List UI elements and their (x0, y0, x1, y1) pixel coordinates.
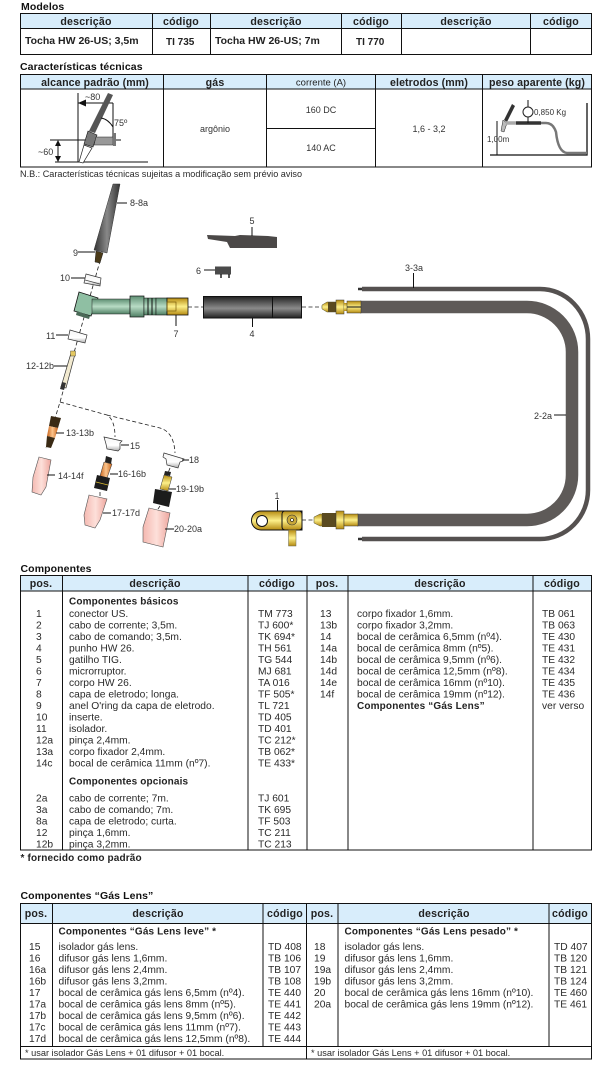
right block: descrições: bocal de cerâmica 6,5mm (nº4). (357, 632, 502, 643)
part 4: handle: 4 (249, 329, 255, 339)
column: descrições: cabo de comando; 7m. (69, 805, 173, 816)
left block: leve: 17b (29, 1011, 46, 1022)
left block: leve: TE 442 (268, 1011, 301, 1022)
left block: leve: TE 444 (268, 1034, 301, 1045)
part 13: fixing body: 13-13b (66, 428, 94, 438)
table header row: código (544, 578, 580, 590)
part 19: heavy gas lens diffuser: 19-19b (176, 484, 204, 494)
column: códigos: TF 505* (258, 690, 294, 700)
column: códigos: TD 401 (258, 724, 292, 735)
right block: descrições: bocal de cerâmica 16mm (nº10). (357, 678, 505, 689)
diagram: peso aparente: 1,00m (487, 135, 510, 144)
table header row (60, 16, 579, 28)
column: descrições: pinça 1,6mm. (69, 828, 131, 839)
table header row: gás (206, 77, 224, 89)
column: descrições: capa de eletrodo; longa. (69, 690, 179, 700)
diagram: exploded view of torch (26, 184, 588, 547)
connector: cable bottom (314, 511, 358, 529)
left block: leve: Componentes “Gás Lens leve” * (58, 926, 216, 938)
left block: leve: TB 108 (268, 976, 301, 988)
table header row: código (267, 908, 303, 920)
column: descrições: conector US. (69, 609, 128, 620)
right block: pesado: bocal de cerâmica gás lens 16mm (nº10). (344, 988, 533, 999)
part 9: o-ring (73, 248, 103, 263)
part 15: gas lens insulator: 15 (130, 441, 140, 451)
table header row: pos. (316, 578, 338, 590)
cell: corrente 140 AC: 140 AC (306, 143, 336, 153)
column: códigos: TF 503 (258, 816, 291, 828)
table header row: código (353, 16, 389, 28)
part 5: trigger (207, 216, 277, 248)
right block: códigos: TE 432 (542, 655, 575, 666)
right block: pesado: 20 (314, 988, 326, 999)
left block: leve: 16b (29, 976, 46, 988)
left block: leve: TE 441 (268, 1000, 301, 1010)
diagram: peso aparente (487, 100, 587, 155)
left block: leve: bocal de cerâmica gás lens 6,5mm (nº4). (58, 988, 245, 999)
part 20: heavy gas lens nozzle: 20-20a (174, 524, 202, 534)
right block: códigos: TE 430 (542, 632, 575, 643)
table header row: pos. (25, 908, 47, 920)
table header row: código (259, 578, 295, 590)
right block: posições: 13b (320, 620, 337, 632)
column: descrições: punho HW 26. (69, 644, 135, 654)
left block: leve: 15 (29, 942, 41, 953)
right block: pesado: 19 (314, 954, 326, 964)
right block: pesado: Componentes “Gás Lens pesado” * (344, 926, 518, 938)
left block: leve: 16a (29, 965, 46, 976)
note: left footer: * usar isolador Gás Lens + 01 difusor + 01 bocal. (25, 1048, 224, 1058)
right block: posições: 14d (320, 666, 337, 678)
column: códigos: TH 561 (258, 644, 292, 654)
part 17: gas lens nozzle: 17-17d (112, 508, 140, 518)
column: códigos: TE 433* (258, 758, 295, 770)
column: posições básicos: 12b (36, 840, 53, 850)
column: posições básicos (36, 609, 53, 850)
heading: Modelos: Modelos (21, 1, 64, 13)
heading: Componentes: Componentes (20, 563, 92, 575)
column: posições básicos: 5 (36, 655, 42, 666)
column: códigos: TK 695 (258, 805, 291, 816)
right block: pesado: difusor gás lens 3,2mm. (344, 976, 453, 988)
column: descrições: gatilho TIG. (69, 655, 122, 666)
right block: pesado: 20a (314, 1000, 331, 1010)
table: características técnicas (20, 74, 592, 167)
column: códigos: TB 062* (258, 747, 295, 758)
column: códigos (258, 609, 296, 850)
cell: gás: argônio (200, 124, 230, 134)
right block: posições: 13 (320, 609, 332, 620)
column: posições básicos: 8a (36, 816, 48, 828)
left block: leve: bocal de cerâmica gás lens 8mm (nº5). (58, 1000, 236, 1010)
column: posições básicos: 11 (36, 724, 47, 735)
column: códigos: TJ 600* (258, 620, 293, 632)
right block: posições: 14 (320, 632, 332, 643)
left block: leve: difusor gás lens 3,2mm. (58, 976, 167, 988)
right block: posições: 14f (320, 690, 334, 700)
column: descrições: pinça 3,2mm. (69, 840, 131, 850)
table header row: descrição (414, 578, 466, 590)
part 18: heavy gas lens insulator: 18 (189, 455, 199, 465)
column: posições básicos: 2a (36, 794, 48, 804)
table: modelos (20, 14, 592, 54)
column: códigos: TC 213 (258, 840, 292, 850)
right block: descrições: bocal de cerâmica 9,5mm (nº6). (357, 655, 502, 666)
right block: pesado: isolador gás lens. (344, 942, 424, 953)
column: descrições: cabo de corrente; 7m. (69, 794, 169, 804)
diagram: alcance padrão: ~80 (85, 92, 100, 102)
right block: códigos: TB 061 (542, 609, 575, 620)
note: N.B.: N.B.: Características técnicas sujeitas a modificação sem prévio aviso (20, 169, 302, 179)
right block: códigos: TE 436 (542, 690, 575, 700)
column: descrições: pinça 2,4mm. (69, 736, 131, 746)
column: códigos: TA 016 (258, 678, 290, 689)
cell: eletrodos: 1,6 - 3,2 (412, 124, 446, 134)
part 3: control cable (358, 263, 588, 539)
column: posições básicos: 13a (36, 747, 53, 758)
right block: posições: 14e (320, 678, 337, 689)
note: right footer: * usar isolador Gás Lens + 01 difusor + 01 bocal. (311, 1048, 510, 1058)
diagram: alcance padrão: ~60 (38, 147, 53, 157)
table header row (25, 908, 588, 920)
left block: leve: TE 440 (268, 988, 301, 999)
assembly dashed lines (46, 254, 322, 520)
column: posições básicos: 9 (36, 701, 42, 712)
part 3: control cable: 3-3a (405, 263, 423, 273)
table header row: descrição (418, 908, 470, 920)
part 16: gas lens diffuser: 16-16b (118, 469, 146, 479)
column: descrições: cabo de comando; 3,5m. (69, 632, 182, 643)
footnote: fornecido como padrão: * fornecido como padrão (20, 853, 142, 864)
part 17: gas lens nozzle (84, 495, 140, 528)
column: descrições: corpo fixador 2,4mm. (69, 747, 165, 758)
right block: descrições: bocal de cerâmica 12,5mm (nº8). (357, 666, 508, 678)
table header row: descrição (440, 16, 492, 28)
right block: descrições: corpo fixador 3,2mm. (357, 620, 453, 632)
right block: descrições (357, 609, 508, 712)
right block: códigos: ver verso (542, 701, 584, 712)
right block: códigos: TE 435 (542, 678, 575, 689)
right block: pesado: TD 407 (554, 942, 588, 953)
part 13: fixing body (46, 416, 94, 448)
right block: pesado: difusor gás lens 1,6mm. (344, 954, 453, 964)
column: descrições: cabo de corrente; 3,5m. (69, 620, 177, 632)
left block: leve: difusor gás lens 2,4mm. (58, 965, 167, 976)
column: descrições (69, 596, 215, 850)
right block: pesado: 18 (314, 942, 326, 953)
part 8: electrode cap: 8-8a (130, 198, 148, 208)
left block: leve: 17a (29, 1000, 46, 1010)
column: posições básicos: 2 (36, 620, 42, 632)
column: códigos: TG 544 (258, 655, 292, 666)
column: posições básicos: 12a (36, 736, 53, 746)
right block: códigos: TE 434 (542, 666, 575, 678)
column: posições básicos: 4 (36, 644, 42, 654)
column: descrições: isolador. (69, 724, 107, 735)
column: posições básicos: 3 (36, 632, 42, 643)
column: descrições: inserte. (69, 712, 103, 724)
table body row: TI 770 (356, 37, 385, 48)
column: posições básicos: 1 (36, 609, 42, 620)
heading: Componentes Gás Lens: Componentes “Gás Lens” (20, 890, 153, 902)
part 7: torch body (74, 292, 188, 339)
table header row: peso aparente (kg) (489, 77, 585, 89)
left block: leve: bocal de cerâmica gás lens 9,5mm (nº6). (58, 1011, 245, 1022)
right block: descrições: corpo fixador 1,6mm. (357, 609, 453, 620)
table header row: pos. (30, 578, 52, 590)
left block: leve: difusor gás lens 1,6mm. (58, 954, 167, 964)
right block: descrições: bocal de cerâmica 8mm (nº5). (357, 644, 493, 654)
table header row: código (552, 908, 588, 920)
table body row: Tocha HW 26-US; 7m (215, 35, 320, 47)
table body row: TI 735 (166, 37, 195, 48)
part 14: ceramic nozzle: 14-14f (58, 471, 84, 481)
table header row: descrição (129, 578, 181, 590)
right block: pesado: TE 461 (554, 1000, 587, 1010)
table body row: Tocha HW 26-US; 3,5m (25, 35, 139, 47)
left block: leve: bocal de cerâmica gás lens 12,5mm (nº8). (58, 1034, 250, 1045)
table: componentes (20, 576, 592, 850)
column: códigos: TK 694* (258, 632, 295, 643)
column: códigos: TD 405 (258, 712, 292, 724)
table header row: código (543, 16, 579, 28)
heading: Características técnicas: Características técnicas (20, 61, 143, 73)
table header row: eletrodos (mm) (390, 77, 468, 89)
column: posições básicos: 14c (36, 758, 53, 770)
table header row: alcance padrão (mm) (41, 77, 149, 89)
right block: pesado (314, 926, 588, 1010)
part 2: current cable (357, 307, 572, 520)
part 12: collet (26, 351, 76, 390)
part 20: heavy gas lens nozzle (143, 508, 202, 547)
part 19: heavy gas lens diffuser (153, 471, 204, 507)
left block: leve: isolador gás lens. (58, 942, 138, 953)
column: descrições: capa de eletrodo; curta. (69, 816, 177, 828)
table header row: descrição (132, 908, 184, 920)
right block: pesado: TB 120 (554, 954, 587, 964)
part 6: microswitch: 6 (196, 266, 201, 276)
column: códigos: MJ 681 (258, 666, 292, 678)
table header row: descrição (250, 16, 302, 28)
part 18: heavy gas lens insulator (163, 453, 199, 468)
right block: posições: 14b (320, 655, 337, 666)
left block: leve: TE 443 (268, 1022, 301, 1034)
part 8: electrode cap (94, 184, 148, 253)
connector: cable top (322, 300, 361, 314)
right block: posições (320, 609, 337, 700)
table header row (30, 578, 580, 590)
part 1: US connector (252, 491, 302, 546)
diagram: peso aparente: 0,850 Kg (534, 108, 566, 117)
column: descrições: anel O'ring da capa de eletrodo. (69, 701, 215, 712)
part 10: insert (60, 273, 101, 286)
part 2: current cable: 2-2a (534, 411, 552, 421)
column: posições básicos: 10 (36, 712, 48, 724)
diagram: alcance padrão (38, 92, 148, 163)
column: descrições: bocal de cerâmica 11mm (nº7). (69, 758, 210, 770)
right block: pesado: difusor gás lens 2,4mm. (344, 965, 453, 976)
column: descrições: corpo HW 26. (69, 678, 132, 689)
part 14: ceramic nozzle (32, 457, 84, 495)
table header row: corrente (A) (296, 78, 346, 88)
part 9: o-ring: 9 (73, 248, 78, 258)
left block: leve (29, 926, 302, 1045)
right block: descrições: Componentes “Gás Lens” (357, 701, 485, 712)
part 6: microswitch (196, 266, 231, 278)
part 11: insulator (46, 330, 87, 343)
right block: pesado: TE 460 (554, 988, 587, 999)
part 12: collet: 12-12b (26, 361, 54, 371)
right block: posições: 14a (320, 644, 337, 654)
part 1: US connector: 1 (274, 491, 280, 501)
right block: pesado: 19a (314, 965, 331, 976)
right block: pesado: bocal de cerâmica gás lens 19mm (nº12). (344, 1000, 533, 1010)
left block: leve: 17d (29, 1034, 46, 1045)
column: posições básicos: 7 (36, 678, 42, 689)
column: posições básicos: 12 (36, 828, 48, 839)
diagram: alcance padrão: 75º (114, 118, 128, 128)
table: componentes gás lens (20, 904, 592, 1059)
part 4: handle (204, 296, 302, 339)
right block: códigos: TB 063 (542, 620, 575, 632)
column: códigos: TC 212* (258, 736, 296, 746)
column: descrições: Componentes opcionais (69, 776, 189, 788)
part 10: insert: 10 (60, 273, 70, 283)
cell: corrente 160 DC: 160 DC (306, 105, 337, 115)
table header row: código (163, 16, 199, 28)
part 15: gas lens insulator (104, 437, 140, 451)
part 11: insulator: 11 (46, 331, 55, 341)
right block: pesado: TB 121 (554, 965, 587, 976)
table header row: descrição (60, 16, 112, 28)
right block: códigos: TE 431 (542, 644, 575, 654)
right block: pesado: 19b (314, 976, 331, 988)
column: posições básicos: 6 (36, 666, 42, 678)
column: códigos: TL 721 (258, 701, 290, 712)
right block: pesado: TB 124 (554, 976, 587, 988)
left block: leve: TD 408 (268, 942, 302, 953)
left block: leve: bocal de cerâmica gás lens 11mm (nº7). (58, 1022, 241, 1034)
part 5: trigger: 5 (249, 216, 255, 226)
column: códigos: TJ 601 (258, 794, 290, 804)
left block: leve: TB 107 (268, 965, 301, 976)
right block: códigos (542, 609, 584, 712)
right block: descrições: bocal de cerâmica 19mm (nº12). (357, 690, 505, 700)
table body row (25, 35, 385, 48)
left block: leve: 16 (29, 954, 41, 964)
column: códigos: TM 773 (258, 609, 293, 620)
left block: leve: 17 (29, 988, 41, 999)
column: descrições: Componentes básicos (69, 596, 179, 608)
column: códigos: TC 211 (258, 828, 291, 839)
left block: leve: TB 106 (268, 954, 301, 964)
table header row (41, 77, 585, 89)
part 16: gas lens diffuser (94, 456, 146, 491)
column: posições básicos: 8 (36, 690, 42, 700)
part 7: torch body: 7 (173, 329, 179, 339)
table header row: pos. (311, 908, 333, 920)
left block: leve: 17c (29, 1022, 46, 1034)
column: posições básicos: 3a (36, 805, 48, 816)
column: descrições: microrruptor. (69, 666, 127, 678)
